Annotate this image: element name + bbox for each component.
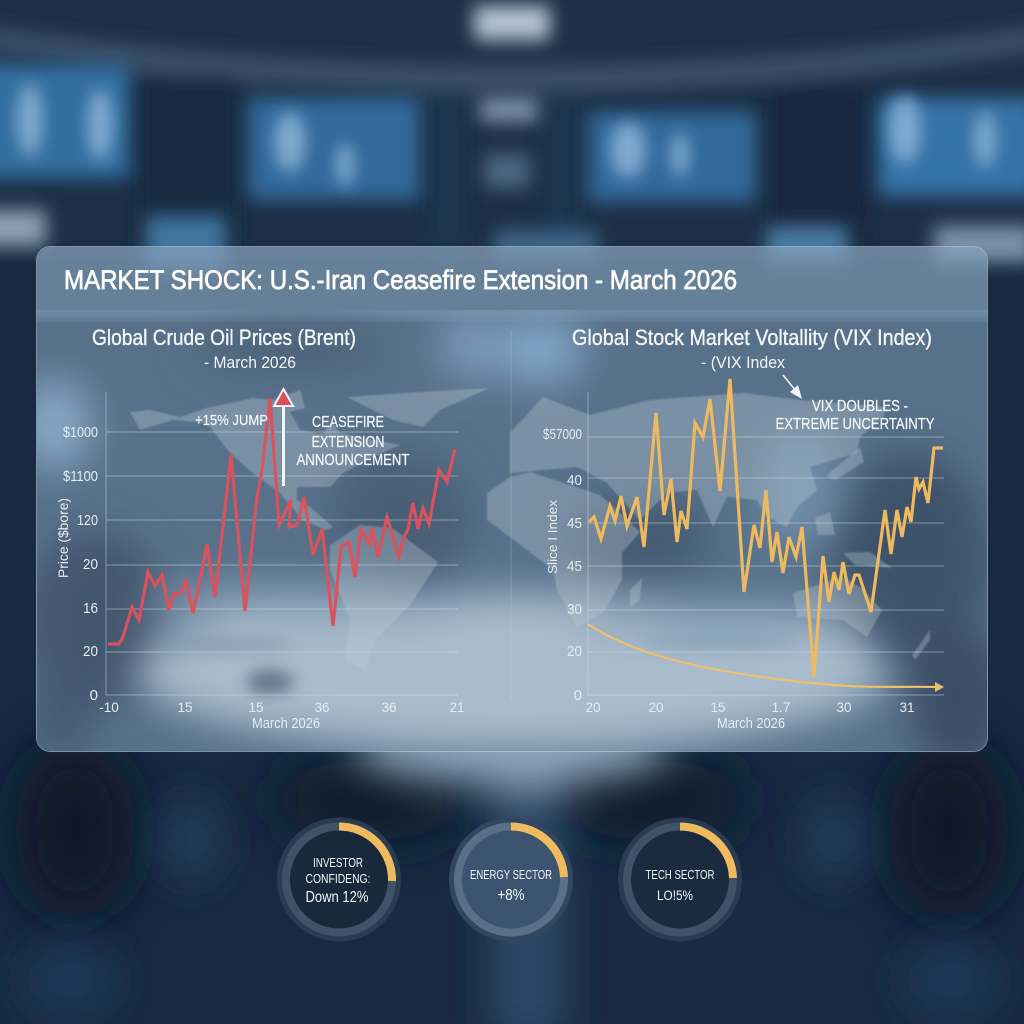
oil y axis labels: 16 <box>83 600 98 617</box>
callout: vix doubles <box>776 398 935 433</box>
southeast asia islands <box>815 512 892 568</box>
callout: ceasefire announcement: CEASEFIRE <box>312 414 384 431</box>
oil y axis labels: 20 <box>83 556 98 573</box>
callout: vix doubles: VIX DOUBLES - <box>812 398 908 415</box>
vix x axis labels: 31 <box>899 700 915 715</box>
oil x axis labels: -10 <box>99 700 119 715</box>
north america <box>130 390 400 530</box>
center divider <box>510 330 512 700</box>
gauge: energy sector: +8% <box>498 887 525 904</box>
chart heading: vix: Global Stock Market Voltallity (VIX Index) <box>572 325 932 350</box>
vix y axis labels: 45 <box>567 558 582 575</box>
chart heading: vix: - (VIX Index <box>701 353 785 372</box>
callout: ceasefire announcement: ANNOUNCEMENT <box>296 452 410 469</box>
gauge: investor confidence <box>277 818 401 942</box>
oil x axis labels: 36 <box>381 700 397 715</box>
announcement arrow <box>274 389 293 486</box>
vix x axis labels: 30 <box>836 700 852 715</box>
panel outline <box>36 246 988 752</box>
vix decay curve <box>588 624 944 692</box>
africa <box>487 472 640 627</box>
oil x axis labels: March 2026 <box>252 715 320 732</box>
oil y axis title: Price ($bore) <box>55 498 71 578</box>
gauge: tech sector: LO!5% <box>657 887 693 903</box>
oil y axis labels <box>63 424 98 704</box>
eurasia <box>510 393 887 527</box>
vix y axis labels: 20 <box>567 643 582 660</box>
vix y axis labels: 0 <box>574 687 582 704</box>
madagascar <box>630 578 642 608</box>
oil y axis labels: $1100 <box>63 468 98 485</box>
oil y axis labels: 0 <box>90 687 98 704</box>
japan <box>826 447 864 480</box>
vix gridlines and axes <box>588 392 944 695</box>
vix y axis title: Slice I Index <box>545 499 560 574</box>
title: MARKET SHOCK: U.S.-Iran Ceasefire Extension - March 2026 <box>64 265 737 295</box>
callout: ceasefire announcement <box>296 414 410 469</box>
chart heading: vix <box>572 325 932 372</box>
oil y axis labels: $1000 <box>63 424 98 441</box>
callout: ceasefire announcement: EXTENSION <box>312 434 384 451</box>
oil x axis labels <box>99 700 465 732</box>
new zealand <box>912 630 930 660</box>
australia <box>793 577 882 637</box>
vix x axis labels: 20 <box>648 700 664 715</box>
chart heading: oil: - March 2026 <box>204 353 296 372</box>
callout: vix doubles: EXTREME UNCERTAINTY <box>776 416 935 433</box>
oil x axis labels: 21 <box>449 700 465 715</box>
greenland <box>347 388 490 427</box>
oil y axis labels: 120 <box>77 512 98 529</box>
gauge: tech sector: TECH SECTOR <box>646 867 714 882</box>
vix y axis labels: $57000 <box>543 426 582 443</box>
oil y axis labels: 20 <box>83 643 98 660</box>
vix x axis labels: 1.7 <box>772 700 790 715</box>
gauge: tech sector <box>618 818 742 942</box>
vix y axis labels: 45 <box>567 515 582 532</box>
gauge: investor confidence: Down 12% <box>306 889 369 906</box>
panel body <box>19 247 1010 770</box>
south america <box>330 525 438 670</box>
gauge: investor confidence: INVESTOR <box>313 855 363 870</box>
vix y axis labels: 40 <box>567 472 582 489</box>
vix y axis labels: 30 <box>567 601 582 618</box>
oil x axis labels: 36 <box>314 700 330 715</box>
oil x axis labels: 15 <box>248 700 264 715</box>
gauge: investor confidence: CONFIDENG: <box>306 871 370 886</box>
vix x axis labels: 20 <box>585 700 601 715</box>
callout: jump: +15% JUMP <box>195 412 268 429</box>
gauge: energy sector: ENERGY SECTOR <box>470 867 552 882</box>
glass dashboard panel <box>36 246 988 752</box>
callout arrow <box>783 375 802 399</box>
gauge: energy sector <box>449 818 573 942</box>
vix x axis labels: 15 <box>710 700 726 715</box>
vix y axis labels <box>543 426 582 704</box>
vix x axis labels <box>585 700 915 732</box>
oil price line <box>108 398 455 644</box>
chart heading: oil: Global Crude Oil Prices (Brent) <box>92 325 356 350</box>
oil x axis labels: 15 <box>177 700 193 715</box>
vix x axis labels: March 2026 <box>717 715 785 732</box>
chart heading: oil <box>92 325 356 372</box>
vix line <box>589 379 943 677</box>
oil gridlines and axes <box>106 392 458 695</box>
